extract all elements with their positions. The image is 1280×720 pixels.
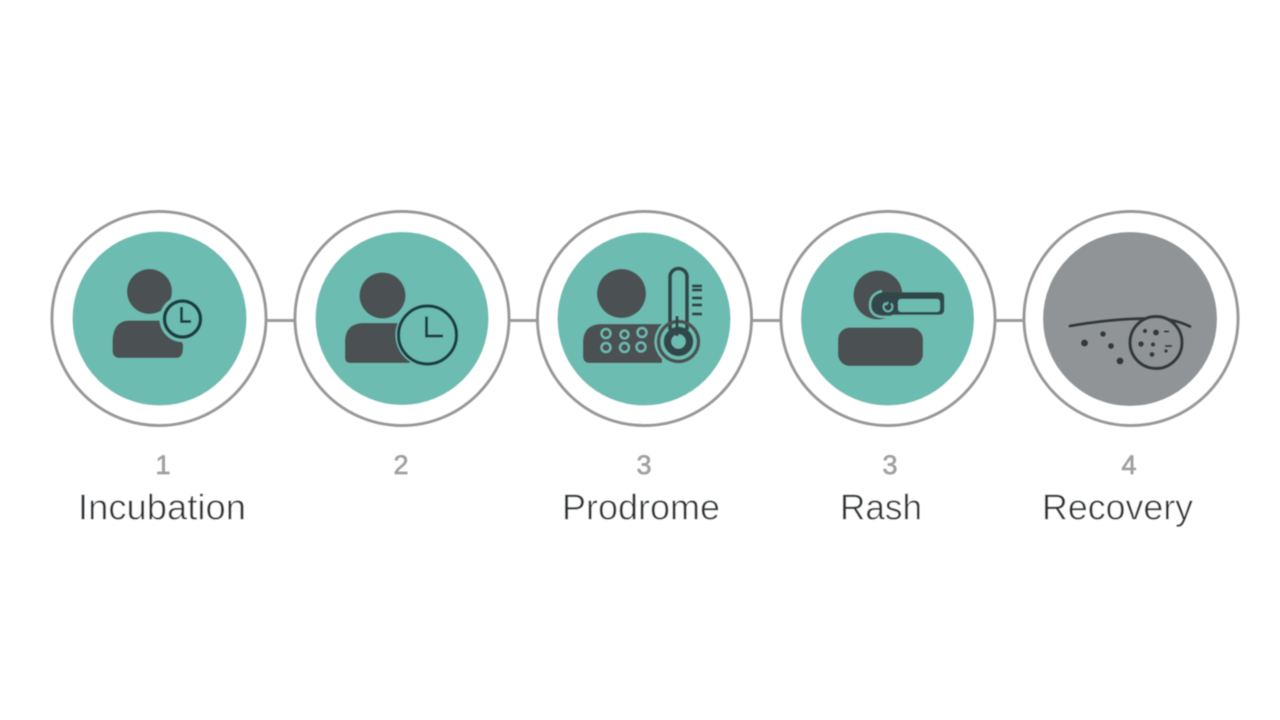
step number 3 (rash): 3 [882,450,898,480]
stage 4 badge: rash [781,212,995,426]
icon: person with pill-shaped rash marker [838,270,944,366]
step number 4: 4 [1121,450,1137,480]
step number 3: 3 [636,450,652,480]
stage 2 badge [295,212,509,426]
icon: person with small clock [112,269,206,358]
stage 5 badge: recovery [1024,212,1238,426]
stage 1 badge: incubation [52,212,266,426]
icon: skin surface with fading spots [1070,316,1190,368]
label: Rash: Rash [840,486,922,528]
step number 2: 2 [393,450,409,480]
label: Incubation: Incubation [78,486,246,528]
connector lines [266,319,1024,322]
icon: person with rash spots and thermometer [583,268,702,366]
icon: person with large clock [345,272,460,367]
label: Recovery: Recovery [1042,486,1194,528]
step number 1: 1 [155,450,171,480]
label: Prodrome: Prodrome [562,486,720,528]
stage 3 badge: prodrome [538,212,752,426]
